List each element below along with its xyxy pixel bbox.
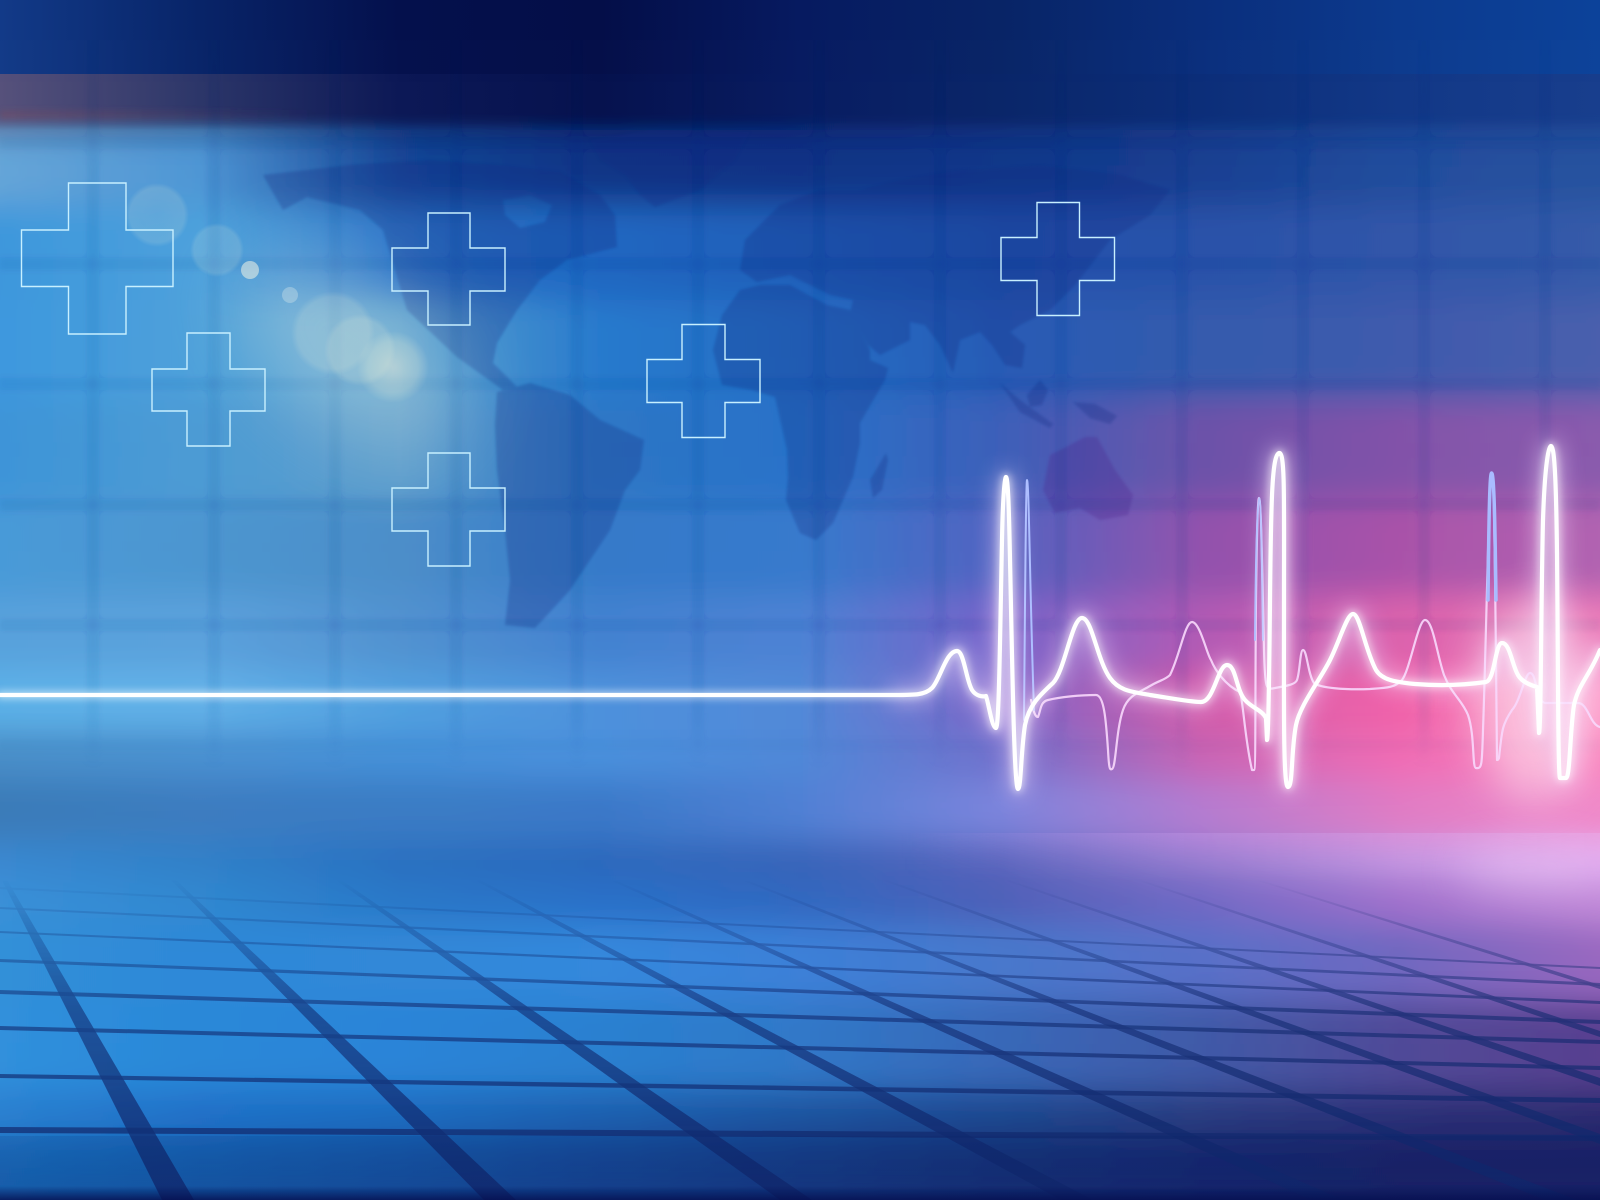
reddish streak [0,110,1600,120]
haze band at upper left [0,74,798,128]
australia [1043,437,1133,520]
pale blue spikes [1024,473,1496,720]
north america [263,160,617,390]
cross 2 [152,333,265,446]
soft glow [205,213,495,487]
south america [495,383,644,628]
cross 4 [392,453,505,566]
main trace line [0,446,1600,789]
cross 3 [392,213,505,325]
floor grid [0,880,1600,1200]
world map [263,130,1170,628]
wall grid [84,139,1600,749]
background: colour base at bottom [0,1135,1600,1200]
horizon seam on the right [976,833,1600,862]
top band [0,0,1600,74]
glow: light behind ECG [1460,600,1600,886]
eurasia [740,165,1170,373]
greenland [590,130,750,207]
secondary faint trace [1031,473,1600,770]
main trace outer glow [895,446,1600,789]
icon: medical crosses [22,183,1114,566]
southeast asia islands [1000,383,1053,428]
cross 6 [1001,202,1114,316]
cross 5 [647,324,760,438]
chart: ECG heartbeat trace [0,446,1600,789]
lens flare [125,183,495,487]
africa [713,285,888,540]
madagascar [870,453,888,498]
main trace inner glow [0,446,1600,789]
bottom edge [0,1186,1600,1200]
receding floor lines [2,880,194,1200]
floor foreground shading [0,1136,1600,1200]
cross 1 [22,183,173,334]
cross floor lines [0,1127,1600,1141]
